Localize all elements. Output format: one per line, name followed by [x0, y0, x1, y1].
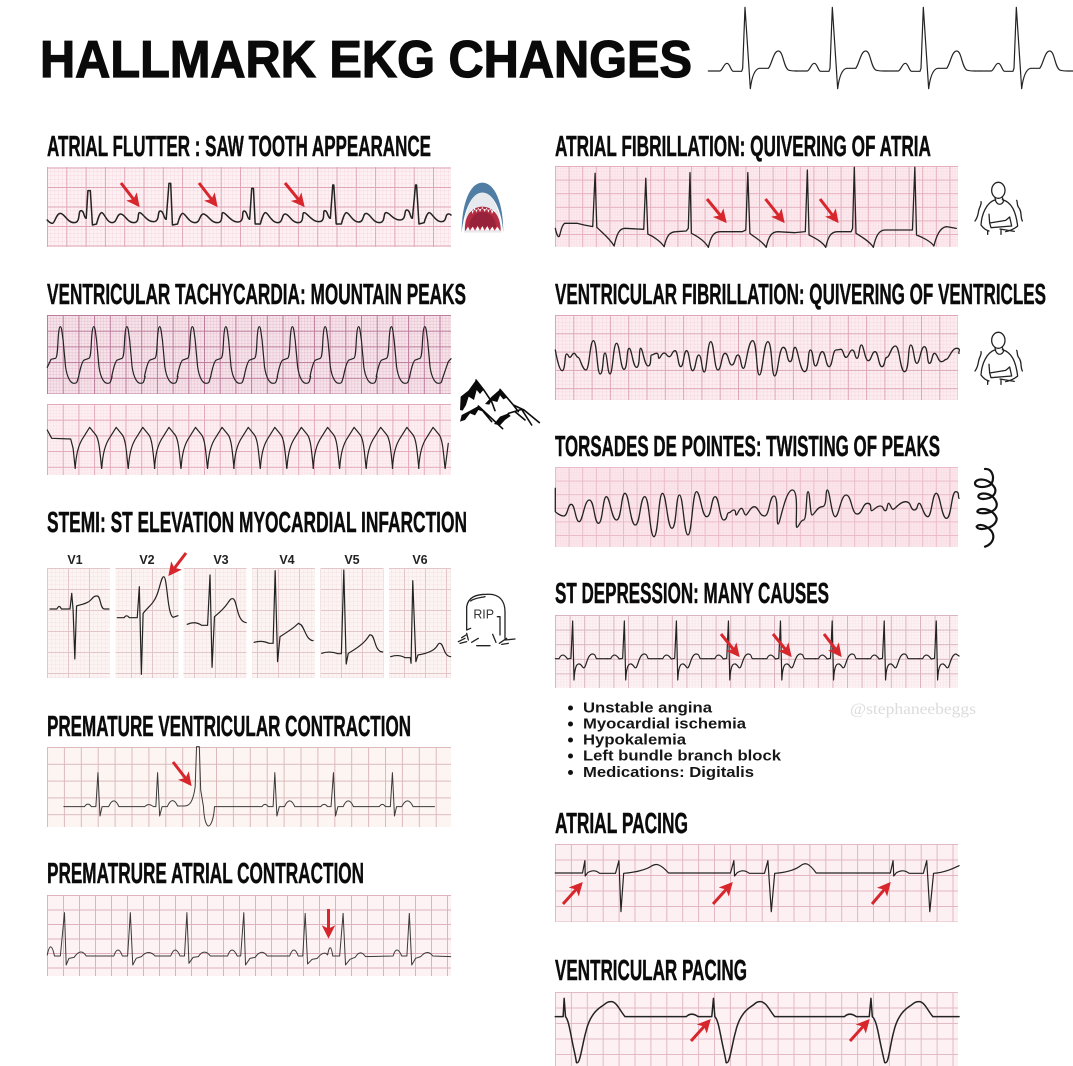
panel: torsades de pointes — [555, 431, 997, 547]
ECG trace — [555, 861, 959, 912]
arrow 2 — [199, 183, 216, 205]
heading: ST depression: ST DEPRESSION: MANY CAUSES — [555, 578, 829, 610]
ECG strip grid 2 — [47, 404, 451, 475]
ECG strip grid — [47, 167, 451, 247]
heading: PVC: PREMATURE VENTRICULAR CONTRACTION — [47, 711, 411, 743]
arrow 3 — [824, 634, 840, 655]
ECG strip grid — [555, 992, 958, 1066]
lead labels: V6 — [412, 553, 428, 567]
ECG strip grid — [555, 844, 958, 922]
arrow 3 — [820, 199, 837, 221]
ECG trace — [555, 488, 959, 537]
ECG trace — [555, 621, 959, 680]
arrow 3 — [872, 884, 889, 904]
ECG trace — [47, 183, 451, 225]
ECG strip grid — [555, 166, 958, 247]
arrow 1 — [707, 199, 725, 221]
arrow 1 — [691, 1021, 709, 1041]
arrow 3 — [285, 183, 303, 205]
arrow 2 — [773, 634, 790, 655]
ECG strip grid — [47, 895, 451, 976]
ECG trace — [47, 913, 451, 965]
panel: ventricular pacing — [555, 955, 959, 1066]
lead labels: V1 — [67, 553, 83, 567]
bullet list of causes: Hypokalemia — [583, 732, 687, 748]
heading: atrial flutter: ATRIAL FLUTTER : SAW TOOTH APPEARANCE — [47, 131, 431, 163]
bullet list of causes — [568, 700, 782, 781]
arrow 1 — [563, 884, 581, 904]
panel: ventricular tachycardia — [47, 279, 539, 475]
arrow 1 — [721, 634, 738, 655]
bullet list of causes: Unstable angina — [583, 700, 713, 716]
panel: ST depression — [555, 578, 976, 781]
heading: STEMI: STEMI: ST ELEVATION MYOCARDIAL INFARCTION — [47, 507, 467, 539]
heading: atrial pacing: ATRIAL PACING — [555, 808, 688, 840]
lead labels: V2 — [139, 553, 155, 567]
panel: premature atrial contraction — [47, 858, 451, 976]
heading: ventricular pacing: VENTRICULAR PACING — [555, 955, 747, 987]
icon: shivering person — [975, 332, 1022, 384]
ECG trace — [555, 998, 959, 1063]
panel: atrial pacing — [555, 808, 959, 922]
ECG trace — [555, 341, 959, 376]
icon: spiral — [975, 469, 997, 547]
panel: atrial fibrillation — [555, 131, 1022, 247]
lead labels: V3 — [213, 553, 229, 567]
arrow 2 — [766, 199, 783, 221]
ECG trace 1 — [47, 327, 451, 383]
arrow 2 — [713, 884, 731, 904]
arrow — [327, 909, 330, 936]
panel: STEMI — [47, 507, 515, 678]
lead grids V1 to V6 — [47, 568, 451, 678]
arrow V2 — [170, 553, 186, 574]
ECG strip grid — [555, 615, 958, 688]
icon: shivering person — [975, 182, 1022, 234]
ECG strip grid 1 — [47, 315, 451, 394]
heading: PAC: PREMATRURE ATRIAL CONTRACTION — [47, 858, 364, 890]
title: HALLMARK EKG CHANGES — [40, 31, 692, 89]
icon: tombstone: RIP — [473, 607, 494, 622]
bullet list of causes: Medications: Digitalis — [583, 764, 754, 781]
icon: shark — [462, 183, 503, 233]
icon: mountains — [460, 380, 539, 429]
lead traces V1 to V6 — [50, 570, 451, 674]
ECG trace 2 — [47, 427, 448, 468]
arrow 2 — [850, 1021, 868, 1041]
lead labels: V4 — [279, 553, 295, 567]
lead labels: V5 — [344, 553, 360, 567]
decorative header ECG trace — [708, 7, 1073, 89]
ECG strip grid — [555, 315, 958, 400]
ECG trace — [555, 167, 956, 247]
watermark: @stephaneebeggs — [850, 701, 976, 718]
heading: ventricular tachycardia: VENTRICULAR TACHYCARDIA: MOUNTAIN PEAKS — [47, 279, 466, 311]
bullet list of causes: Myocardial ischemia — [583, 716, 747, 732]
ECG strip grid — [555, 467, 958, 547]
arrow — [173, 762, 190, 784]
icon: tombstone — [458, 594, 515, 646]
arrow 1 — [121, 183, 138, 205]
ECG strip grid — [47, 747, 451, 827]
ECG trace — [64, 747, 434, 826]
panel: ventricular fibrillation — [555, 279, 1046, 400]
panel: atrial flutter — [47, 131, 503, 247]
panel: premature ventricular contraction — [47, 711, 451, 827]
bullet list of causes: Left bundle branch block — [583, 748, 782, 764]
lead labels — [67, 553, 428, 567]
